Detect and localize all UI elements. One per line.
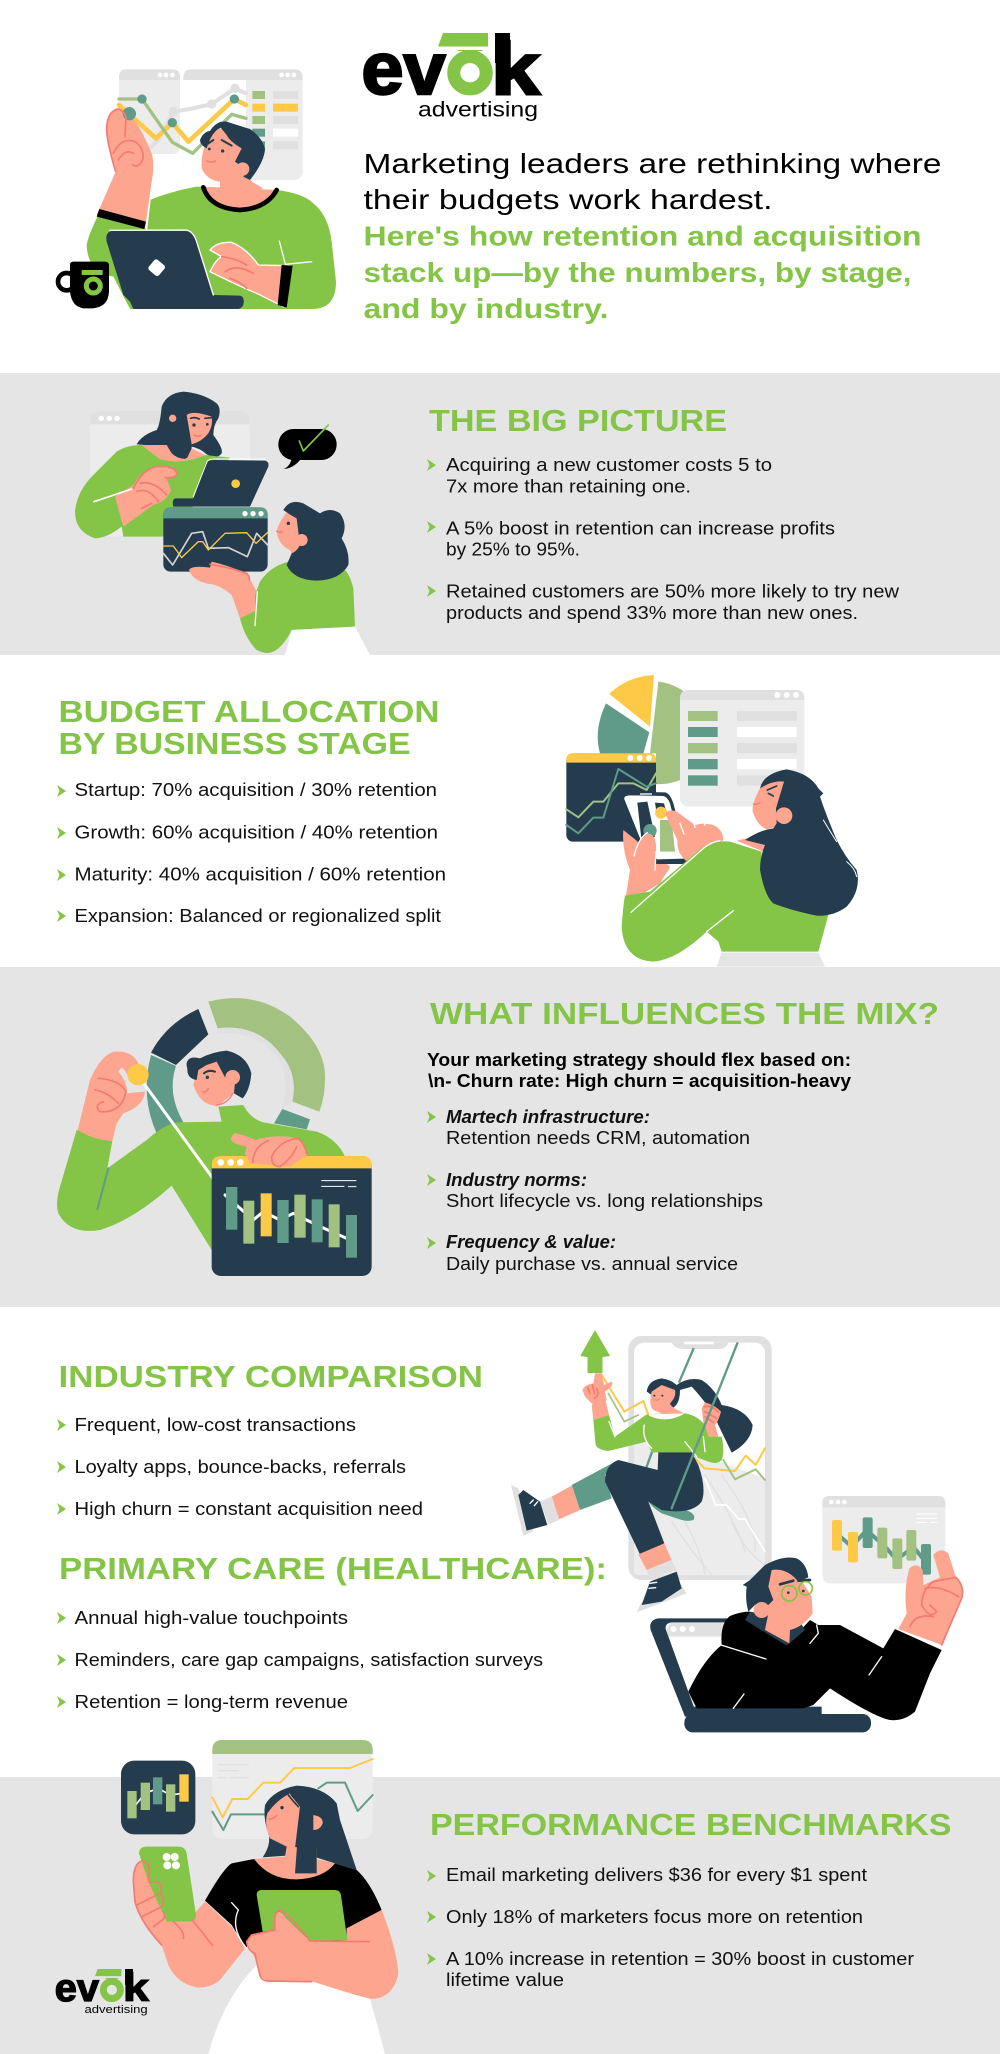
bullet: martech: Retention needs CRM, automation	[446, 1128, 750, 1148]
illustration: man in laptop with chart	[650, 1496, 963, 1732]
growth arrow	[581, 1331, 609, 1373]
section: industry comparison	[57, 1359, 483, 1519]
phone	[620, 792, 688, 864]
bullet: retention revenue: Retention = long-term revenue	[74, 1692, 348, 1712]
right arm and thumb	[247, 1910, 398, 1999]
fingers	[665, 810, 723, 865]
bullet: profits	[427, 518, 835, 560]
trousers	[605, 1452, 704, 1554]
front hair strand	[290, 1792, 328, 1873]
bullet: martech	[427, 1107, 750, 1148]
heading: PRIMARY CARE (HEALTHCARE):	[59, 1551, 607, 1586]
neck and face	[254, 1793, 335, 1879]
white skirt	[208, 1965, 385, 2054]
coin and pointer	[127, 1064, 225, 1195]
illustration: man with laptop and charts	[58, 69, 336, 309]
chart board	[212, 1156, 372, 1276]
dark chart window	[566, 753, 656, 842]
bullet: marketers: Only 18% of marketers focus more on retention	[446, 1907, 863, 1927]
panel: performance benchmarks background	[0, 1777, 1000, 2054]
bullet: touchpoints: Annual high-value touchpoints	[74, 1608, 348, 1628]
extended leg	[511, 1460, 618, 1536]
heading: BY BUSINESS STAGE	[58, 726, 410, 761]
first woman hair	[137, 392, 222, 459]
second woman green top	[240, 562, 355, 653]
chart panel	[822, 1496, 945, 1583]
logo: evok advertising: advertising	[418, 98, 538, 122]
green phone	[139, 1847, 196, 1922]
typing hand	[210, 242, 290, 307]
gauge ring	[147, 998, 325, 1133]
green top	[593, 1413, 723, 1463]
bullet: frequency and value: Daily purchase vs. annual service	[446, 1254, 738, 1274]
lower leg and shoe	[637, 1543, 687, 1612]
table window	[680, 690, 804, 807]
hair back	[263, 1786, 357, 1870]
section: budget allocation	[57, 694, 446, 926]
bullet: maturity: Maturity: 40% acquisition / 60% retention	[74, 864, 446, 884]
bullet: profits: A 5% boost in retention can increase profits	[446, 518, 835, 538]
heading	[58, 694, 440, 761]
collar	[203, 187, 277, 210]
bullet: lifetime value	[427, 1949, 914, 1990]
bullet: profits: by 25% to 95%.	[446, 540, 580, 560]
bullet: martech: Martech infrastructure:	[446, 1107, 650, 1127]
intro text	[427, 1050, 851, 1091]
bullet: email: Email marketing delivers $36 for every $1 spent	[446, 1865, 867, 1885]
app icon with bars	[121, 1761, 195, 1834]
line chart window	[212, 1740, 373, 1839]
section: what influences the mix	[427, 996, 939, 1274]
left hand	[133, 1861, 245, 1987]
bullet: lifetime value: A 10% increase in retention = 30% boost in customer	[446, 1949, 914, 1969]
bullet: cost: 7x more than retaining one.	[446, 476, 691, 496]
green sweater	[87, 187, 336, 309]
section: primary care	[57, 1551, 607, 1712]
bullet: industry norms: Short lifecycle vs. long relationships	[446, 1191, 763, 1211]
chart tablet	[163, 507, 268, 572]
ear and face details	[206, 140, 249, 176]
hair	[200, 121, 265, 180]
panel: the big picture background	[0, 373, 1000, 655]
bullet: cost	[427, 455, 772, 496]
logo: evok advertising: ō	[449, 28, 491, 108]
logo: small evok advertising: ev	[55, 1967, 100, 2010]
intro text block: Marketing leaders are rethinking where	[364, 148, 942, 179]
pie chart	[598, 675, 687, 784]
hoodie	[688, 1612, 942, 1720]
skirt	[717, 953, 825, 967]
logo: evok advertising	[362, 28, 540, 122]
intro text block: their budgets work hardest.	[364, 184, 772, 215]
black shirt	[205, 1859, 382, 1948]
laptop frame and base	[650, 1618, 871, 1732]
heading: INDUSTRY COMPARISON	[58, 1359, 483, 1394]
bullet: cost: Acquiring a new customer costs 5 to	[446, 455, 772, 475]
laptop	[106, 231, 244, 309]
intro text: \n- Churn rate: High churn = acquisition-heavy	[428, 1071, 851, 1091]
first woman face	[169, 413, 212, 444]
intro text block	[364, 148, 942, 324]
collar	[745, 1612, 805, 1646]
bullet: growth: Growth: 60% acquisition / 40% retention	[74, 822, 438, 842]
thumb hand	[626, 833, 670, 897]
green tablet	[257, 1890, 347, 1941]
bullet: reminders: Reminders, care gap campaigns, satisfaction surveys	[74, 1650, 543, 1670]
illustration: man holding coin and chart board	[57, 998, 372, 1276]
bullet: startup: Startup: 70% acquisition / 30% retention	[74, 780, 437, 800]
intro text block: stack up—by the numbers, by stage,	[364, 257, 912, 288]
second woman skirt	[285, 627, 370, 655]
illustration: woman on swing in phone	[511, 1331, 772, 1612]
heading: BUDGET ALLOCATION	[58, 694, 440, 729]
heading: THE BIG PICTURE	[429, 403, 727, 438]
glasses	[780, 1580, 812, 1601]
section: the big picture	[427, 403, 900, 623]
bullet: churn: High churn = constant acquisition need	[74, 1499, 423, 1519]
head	[202, 128, 263, 198]
raised arm and hand	[97, 109, 153, 229]
hair	[743, 1557, 808, 1612]
rope front	[672, 1343, 737, 1508]
face	[757, 1569, 813, 1643]
bullet: retained customers	[427, 582, 900, 623]
bullet: retained customers: Retained customers are 50% more likely to try new	[446, 582, 900, 602]
logo: evok advertising: k	[491, 29, 540, 110]
bullet: frequency and value	[427, 1232, 738, 1274]
heading: WHAT INFLUENCES THE MIX?	[430, 996, 939, 1031]
face	[753, 781, 783, 829]
hair	[745, 769, 858, 916]
chart windows	[119, 69, 303, 181]
illustration: woman with phone, tablet and charts	[121, 1740, 398, 2054]
phone frame	[628, 1336, 772, 1580]
intro text: Your marketing strategy should flex based on:	[427, 1050, 851, 1070]
bullet: lifetime value: lifetime value	[446, 1970, 564, 1990]
speech bubble with check	[278, 425, 337, 469]
logo: evok advertising: ev	[362, 29, 446, 110]
hair	[647, 1378, 753, 1453]
bullet: expansion: Expansion: Balanced or regionalized split	[74, 906, 441, 926]
arms	[592, 1398, 609, 1420]
bullet: loyalty: Loyalty apps, bounce-backs, referrals	[74, 1457, 406, 1477]
green sweater	[57, 1105, 345, 1250]
ear	[313, 1815, 323, 1830]
logo: small evok advertising: advertising	[84, 2004, 148, 2016]
neck	[737, 838, 768, 852]
raised hand	[898, 1550, 963, 1645]
bullet: industry norms: Industry norms:	[446, 1170, 587, 1190]
section: performance benchmarks	[427, 1807, 952, 1990]
neck	[202, 187, 278, 210]
raised hand	[78, 1051, 145, 1141]
intro text block: Here's how retention and acquisition	[364, 220, 922, 252]
heading: PERFORMANCE BENCHMARKS	[430, 1807, 952, 1842]
head	[193, 1060, 243, 1107]
back hand	[623, 830, 670, 896]
logo: small evok advertising	[55, 1966, 149, 2016]
first woman hand and pencil	[94, 466, 177, 527]
swinging hand	[704, 1406, 718, 1422]
illustration: two women with laptop and chart	[75, 392, 370, 655]
illustration: woman with phone, pie chart and table	[566, 675, 858, 967]
hand on board	[231, 1133, 307, 1167]
second woman arm and hand	[189, 562, 257, 618]
intro text block: and by industry.	[364, 293, 608, 324]
chart lines	[602, 1375, 765, 1552]
laptop	[173, 459, 269, 507]
coffee mug	[58, 262, 109, 308]
swing seat	[648, 1502, 694, 1521]
logo: small evok advertising: k	[123, 1967, 149, 2010]
second woman face and hair	[277, 502, 349, 581]
pointing hand	[582, 1373, 612, 1405]
panel: what influences the mix background	[0, 967, 1000, 1307]
bullet: retained customers: products and spend 33% more than new ones.	[446, 603, 858, 623]
logo: small evok advertising: ō	[101, 1966, 123, 2009]
face and neck	[648, 1385, 685, 1414]
bullet: industry norms	[427, 1170, 763, 1211]
ropes back	[647, 1349, 693, 1467]
first woman green top	[75, 445, 230, 538]
green top	[622, 841, 828, 962]
background window	[90, 411, 250, 537]
bullet: frequency and value: Frequency & value:	[446, 1232, 616, 1252]
bullet: transactions: Frequent, low-cost transactions	[74, 1415, 356, 1435]
